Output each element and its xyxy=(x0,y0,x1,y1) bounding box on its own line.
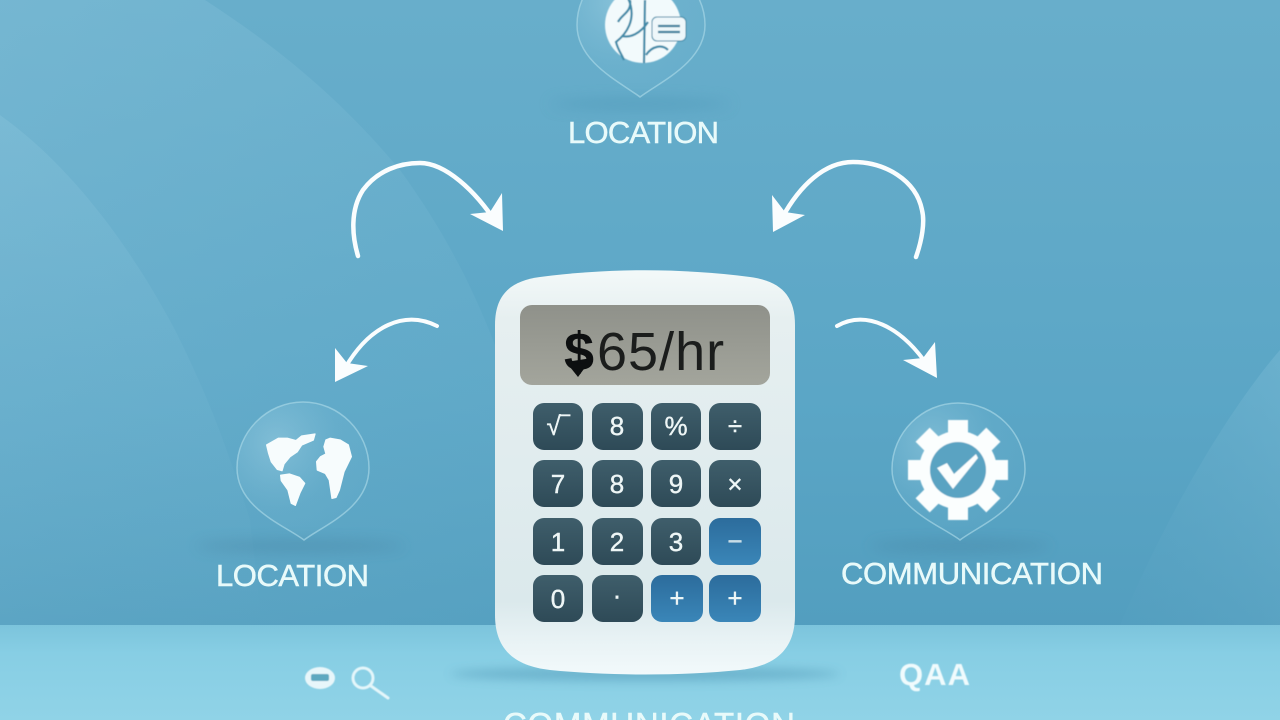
floor xyxy=(0,625,1280,720)
arrow: lower right xyxy=(837,320,937,378)
background hill: right xyxy=(1120,350,1280,625)
label: QAA: QAA xyxy=(899,657,970,692)
pin: communication xyxy=(870,403,1050,551)
calculator shadow xyxy=(450,667,840,681)
key row 3: 2 xyxy=(610,527,624,557)
key row 3: 1 xyxy=(551,527,565,557)
key row 1: 8 xyxy=(610,411,624,441)
key row 2: 9 xyxy=(669,469,683,499)
background hill: lower left xyxy=(0,115,262,625)
pin: left location xyxy=(195,402,405,551)
pin shadow xyxy=(550,99,730,109)
key row 4: + xyxy=(727,583,743,613)
key row 2: × xyxy=(727,469,743,499)
key row 3: 3 xyxy=(669,527,683,557)
background hill: upper left xyxy=(0,0,495,625)
pin shadow xyxy=(195,541,405,551)
icon: small chat blob xyxy=(305,667,335,689)
key row 2: 7 xyxy=(551,469,565,499)
dollar sign blob xyxy=(566,358,592,377)
arrow: top left xyxy=(353,163,503,256)
pin outline xyxy=(892,403,1025,540)
icon: globe with chat bubble xyxy=(605,0,686,63)
icon: magnifier xyxy=(353,668,388,698)
key row 1: √‾ xyxy=(547,411,571,441)
key row 3: − xyxy=(727,526,743,556)
key row 4 xyxy=(533,575,761,622)
key row 4: · xyxy=(613,580,621,610)
label: communication right: COMMUNICATION xyxy=(841,556,1103,591)
pin: top location xyxy=(550,0,730,109)
pin shadow xyxy=(870,541,1050,551)
key row 1: % xyxy=(664,411,688,441)
pin outline xyxy=(577,0,705,97)
key row 1: ÷ xyxy=(728,411,742,441)
label: left location: LOCATION xyxy=(216,558,369,593)
keypad xyxy=(533,403,761,622)
pin outline xyxy=(237,402,369,540)
arrow: top right xyxy=(772,162,923,257)
key row 4: 0 xyxy=(551,584,565,614)
calculator screen xyxy=(520,305,770,385)
screen readout: $ xyxy=(564,322,594,382)
calculator body xyxy=(495,270,795,674)
arrow: lower left xyxy=(335,320,437,382)
label: top location: LOCATION xyxy=(568,115,719,150)
icon: world map xyxy=(267,434,351,505)
key row 2 xyxy=(533,460,761,507)
key row 4: + xyxy=(669,583,685,613)
calculator xyxy=(495,270,795,674)
key row 1 xyxy=(533,403,761,450)
icon: gear with check xyxy=(908,420,1008,520)
key row 3 xyxy=(533,518,761,565)
screen readout: 65/hr xyxy=(597,322,725,382)
key row 2: 8 xyxy=(610,469,624,499)
